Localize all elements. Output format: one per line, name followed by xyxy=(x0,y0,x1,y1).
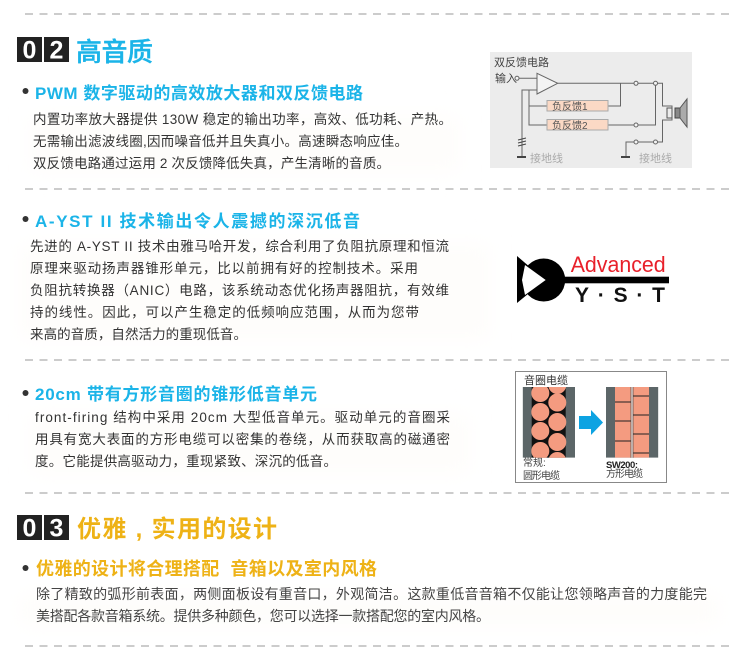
diagram: dual feedback circuit: 负反馈2 xyxy=(552,119,588,132)
feature block: 20cm woofer: 用具有宽大表面的方形电缆可以密集的卷绕，从而获取高的磁通密 xyxy=(35,431,450,447)
feature block: A-YST II: 原理来驱动扬声器锥形单元，比以前拥有好的控制技术。采用 xyxy=(30,260,418,276)
diagram: voice coil cable comparison: 常规: xyxy=(523,456,546,469)
feature block: A-YST II: 持的线性。因此，可以产生稳定的低频响应范围，从而为您带 xyxy=(30,304,419,320)
section heading: 02 high sound quality: 2 xyxy=(50,36,63,64)
diagram: voice coil cable comparison: 音圈电缆 xyxy=(524,373,568,387)
logo: Advanced YST: Advanced xyxy=(571,252,666,277)
feature block: PWM amplifier: 双反馈电路通过运用 2 次反馈降低失真，产生清晰的音质。 xyxy=(33,155,390,171)
section heading: 03 elegant practical design: 3 xyxy=(50,514,63,542)
feature block: A-YST II: 来高的音质，自然活力的重现低音。 xyxy=(30,326,247,342)
section heading: 02 high sound quality: 0 xyxy=(23,36,36,64)
diagram: dual feedback circuit: 输入 xyxy=(495,71,517,85)
diagram: dual feedback circuit: 双反馈电路 xyxy=(494,56,549,69)
section heading: 03 elegant practical design: 优雅 , 实用的设计 xyxy=(77,516,277,543)
diagram: dual feedback circuit: 接地线 xyxy=(639,151,672,165)
square cable cross-section xyxy=(606,387,658,458)
logo: Advanced YST: Y·S·T xyxy=(575,284,665,307)
feature block: PWM amplifier: PWM 数字驱动的高效放大器和双反馈电路 xyxy=(35,83,363,103)
diagram: voice coil cable comparison: 圆形电缆 xyxy=(523,469,560,482)
section heading: 02 high sound quality: 高音质 xyxy=(76,37,153,67)
feature block: elegant design: 美搭配各款音箱系统。提供多种颜色，您可以选择一款搭配您的室内风格。 xyxy=(36,608,490,624)
diagram: dual feedback circuit xyxy=(490,52,692,168)
feature block: A-YST II: 先进的 A-YST II 技术由雅马哈开发，综合利用了负阻抗原理和恒流 xyxy=(30,239,450,254)
feature block: PWM amplifier: 无需输出滤波线圈,因而噪音低并且失真小。高速瞬态响应佳。 xyxy=(33,133,408,149)
feature block: A-YST II: 负阻抗转换器（ANIC）电路，该系统动态优化扬声器阻抗，有效维 xyxy=(30,283,449,298)
feature block: 20cm woofer: front-firing 结构中采用 20cm 大型低音单元。驱动单元的音圈采 xyxy=(35,409,450,425)
feature block: elegant design xyxy=(22,558,707,624)
logo: Advanced YST xyxy=(517,252,669,307)
diagram: dual feedback circuit: 接地线 xyxy=(530,151,563,165)
feature block: PWM amplifier: 内置功率放大器提供 130W 稳定的输出功率，高效、低功耗、产热。 xyxy=(33,111,452,127)
diagram: voice coil cable comparison: SW200: xyxy=(606,460,638,471)
feature block: 20cm woofer xyxy=(22,384,450,469)
section heading: 02 high sound quality xyxy=(17,36,153,67)
feature block: 20cm woofer: 20cm 带有方形音圈的锥形低音单元 xyxy=(35,384,317,404)
section heading: 03 elegant practical design: 0 xyxy=(23,514,36,542)
feature block: elegant design: 优雅的设计将合理搭配 音箱以及室内风格 xyxy=(36,558,377,579)
diagram: voice coil cable comparison: 方形电缆 xyxy=(606,467,643,480)
feature block: 20cm woofer: 度。它能提供高驱动力，重现紧致、深沉的低音。 xyxy=(35,453,337,469)
diagram: dual feedback circuit: 负反馈1 xyxy=(552,100,588,113)
feature block: PWM amplifier xyxy=(22,83,452,171)
feature block: A-YST II xyxy=(22,211,450,342)
feature block: elegant design: 除了精致的弧形前表面，两侧面板设有重音口，外观简洁。这款重低音音箱不仅能让您领略声音的力度能完 xyxy=(36,586,707,602)
diagram: voice coil cable comparison xyxy=(516,372,666,482)
round cable cross-section xyxy=(522,387,575,458)
feature block: A-YST II: A-YST II 技术输出令人震撼的深沉低音 xyxy=(35,211,360,231)
icon: blue arrow xyxy=(579,410,603,435)
